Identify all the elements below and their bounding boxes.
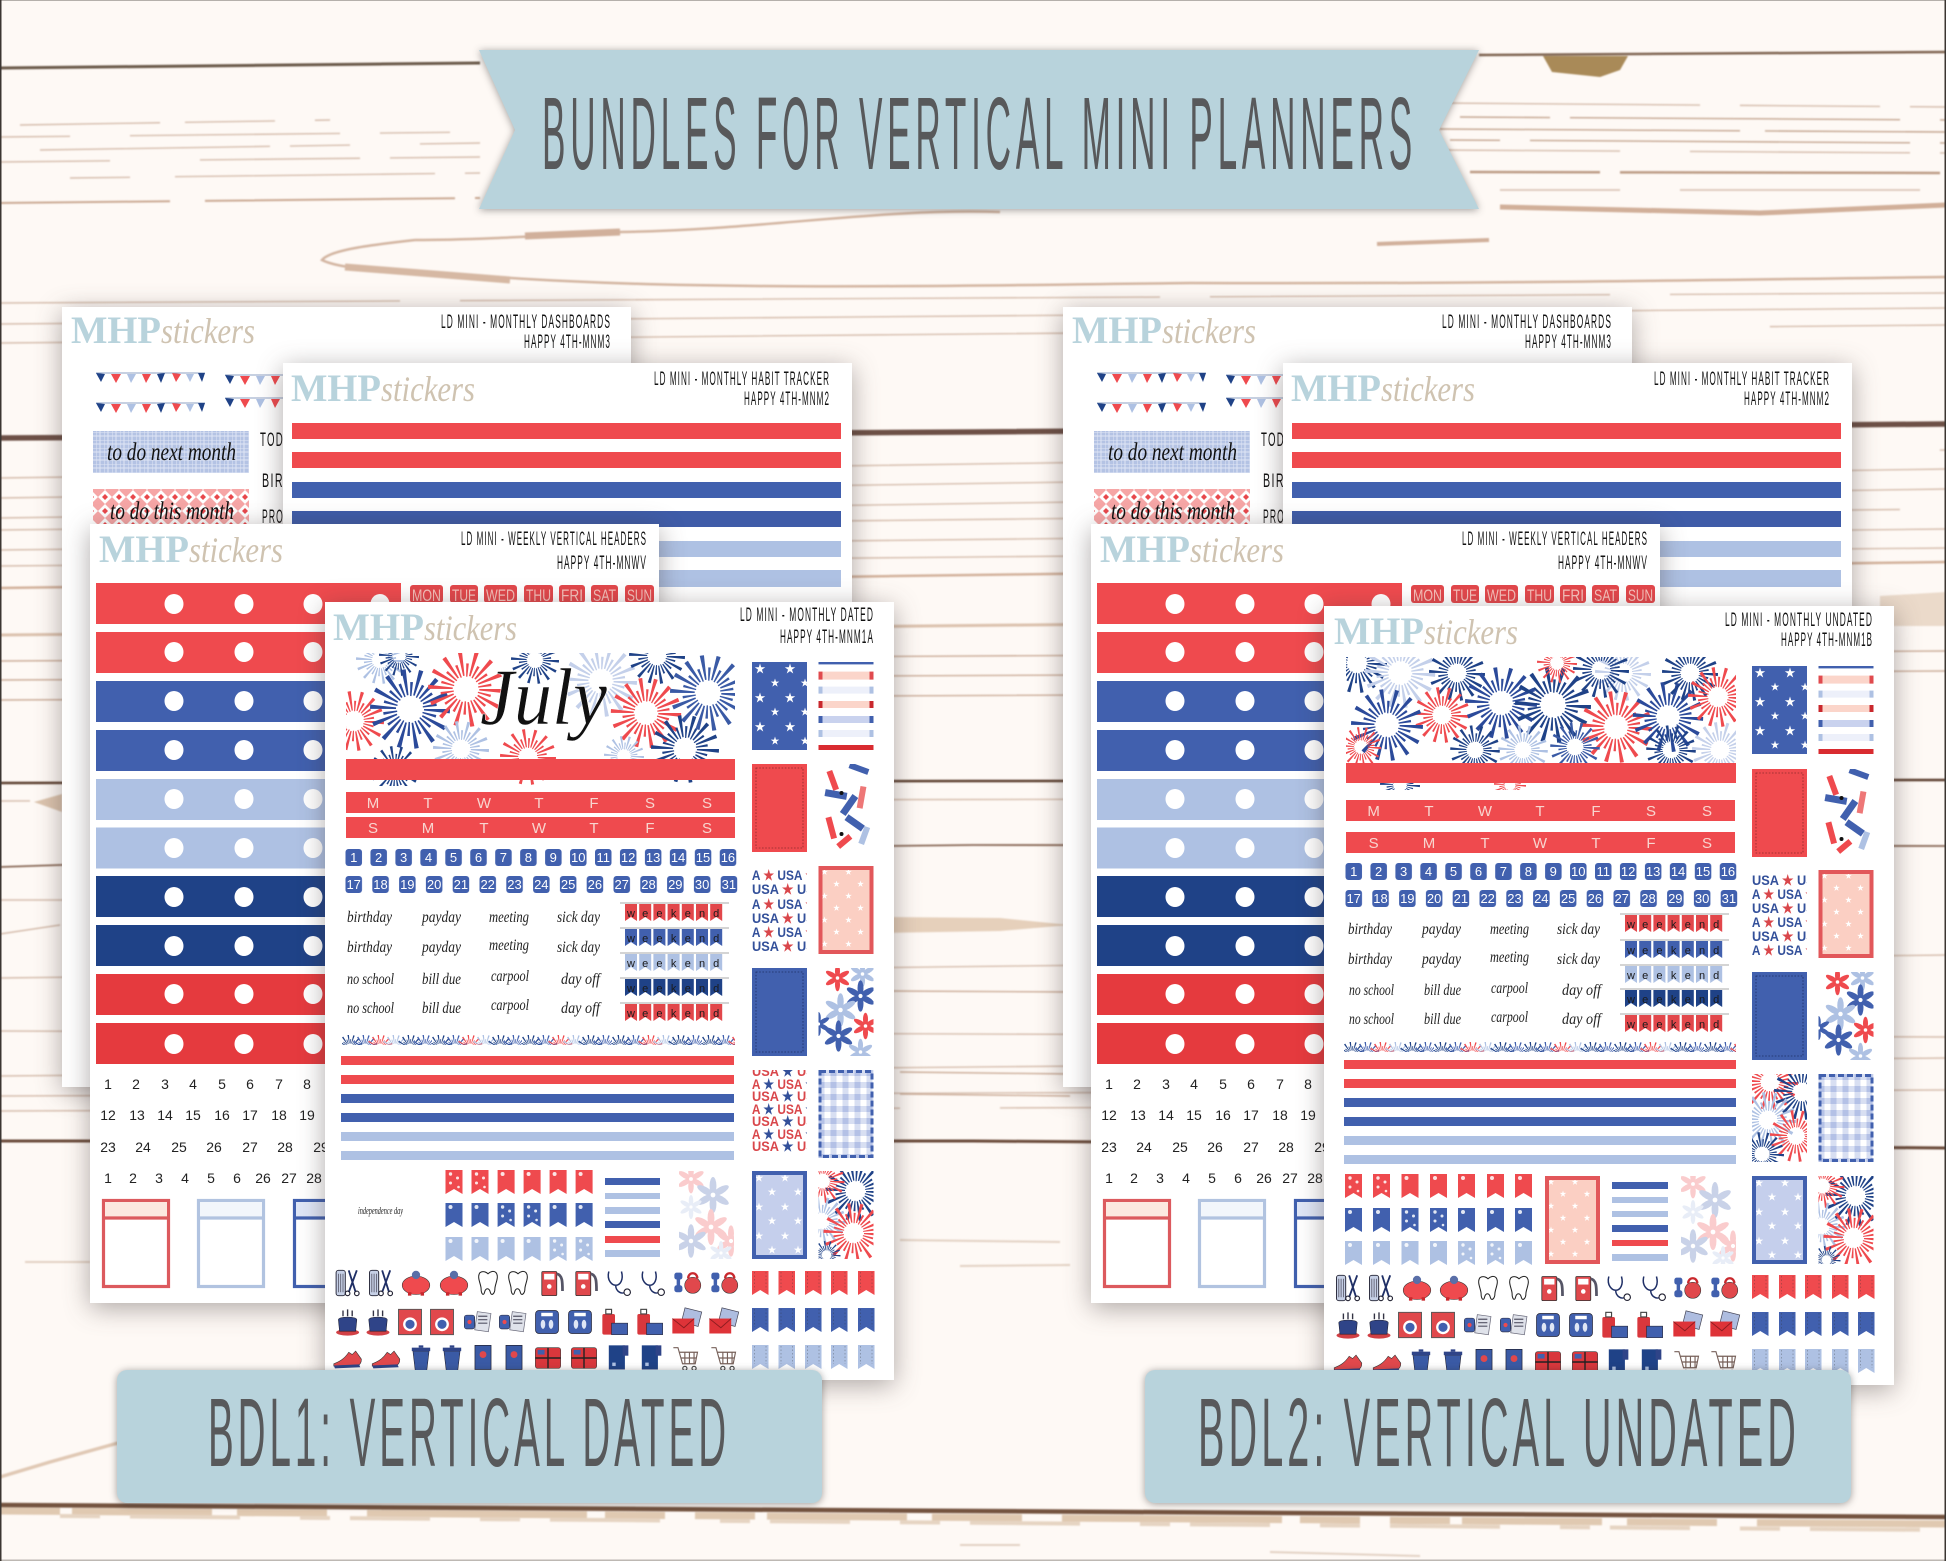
weekday rows: MTWTFSS [367, 795, 712, 812]
USA pattern card red: SA ★ USA ★ [744, 1126, 816, 1142]
date number stickers: 123456789 [1350, 864, 1557, 879]
partial labels [1261, 430, 1285, 528]
script event words: no school [347, 1000, 394, 1017]
date numbers: 17 [242, 1107, 258, 1123]
label: BDL2 vertical undated [1145, 1370, 1851, 1503]
date numbers: 12345678 [1105, 1076, 1312, 1092]
logo: MHP [1334, 610, 1424, 653]
weekday tabs: FRI [1562, 586, 1584, 605]
header bars with dots [96, 583, 401, 1064]
USA pattern card blue [752, 869, 807, 952]
to do next month sticker [93, 431, 249, 473]
date number stickers: 11 [596, 850, 610, 865]
date numbers: 25 [1172, 1139, 1188, 1155]
weekday tabs: THU [1527, 586, 1552, 605]
date numbers: 14 [1158, 1107, 1174, 1123]
logo [1100, 528, 1284, 571]
logo: stickers [424, 608, 517, 648]
script event words [347, 909, 602, 1017]
date numbers: 16 [1215, 1107, 1231, 1123]
USA pattern card red: USA ★ USA [752, 1088, 824, 1104]
weekday rows: SMTWTFS [368, 820, 712, 837]
date number stickers: 30 [695, 877, 709, 892]
habit stripes [292, 423, 841, 587]
weekday tabs: THU [526, 586, 551, 605]
date numbers: 16 [214, 1107, 230, 1123]
date numbers: 19 [1300, 1107, 1316, 1123]
weekend pennant banners: weekend [1626, 945, 1719, 957]
USA pattern card blue: SA ★ USA ★ [1744, 886, 1816, 902]
bundle 1: vertical dated sheets: LD MINI - WEEKLY VERTICAL HEADERS [461, 529, 647, 550]
sheet heading [441, 312, 611, 353]
weekday rows: SMTWTFS [1369, 835, 1712, 852]
date number stickers: 22 [1480, 891, 1495, 906]
USA pattern card red: USA ★ USA [752, 1138, 824, 1154]
bundle 1: vertical dated sheets: HAPPY 4TH-MNWV [557, 553, 647, 574]
bunting stickers [1097, 373, 1335, 413]
USA pattern card red: USA ★ USA [752, 1113, 824, 1129]
date numbers: 123456 [104, 1170, 241, 1186]
date number stickers: 123456789 [350, 850, 557, 865]
date numbers: 26 [255, 1170, 271, 1186]
date numbers: 19 [299, 1107, 315, 1123]
weekend pennant banners: weekend [1626, 919, 1719, 931]
date number stickers: 31 [722, 877, 736, 892]
sheet heading [1725, 610, 1873, 651]
header bars with dots [1097, 583, 1402, 1064]
text: BDL1: VERTICAL DATED [208, 1378, 730, 1487]
script event words: bill due [422, 971, 461, 988]
sheet: monthly dashboards [1063, 307, 1632, 1087]
date number stickers: 19 [400, 877, 415, 892]
USA pattern card blue: USA ★ USA [1752, 872, 1824, 888]
date numbers: 28 [1278, 1139, 1294, 1155]
date number stickers: 14 [671, 850, 685, 865]
logo: stickers [1162, 311, 1256, 351]
date numbers: 18 [1272, 1107, 1288, 1123]
script event words: sick day [1557, 951, 1601, 968]
USA pattern card blue: USA ★ USA [752, 938, 824, 954]
script event words: no school [347, 971, 394, 988]
date number stickers: 18 [1373, 891, 1388, 906]
logo: MHP [291, 367, 381, 410]
logo [1072, 309, 1256, 352]
date number stickers: 26 [1588, 891, 1602, 906]
weekend pennant banners [620, 903, 729, 1021]
logo: MHP [1072, 309, 1162, 352]
sheet: monthly dated [325, 602, 894, 1380]
weekend pennant banners: weekend [626, 983, 719, 995]
logo: stickers [161, 311, 255, 351]
date number stickers: 23 [507, 877, 522, 892]
date number stickers: 16 [721, 850, 735, 865]
script event words: carpool [1491, 1009, 1528, 1026]
right flags [752, 1271, 874, 1369]
USA pattern card blue: SA ★ USA ★ [1744, 914, 1816, 930]
label: BDL1 vertical dated [117, 1370, 822, 1503]
date number stickers: 27 [614, 877, 629, 892]
date number stickers: 28 [1641, 891, 1656, 906]
script event words: birthday [1348, 921, 1393, 938]
date numbers: 26 [206, 1139, 222, 1155]
date numbers: 12 [100, 1107, 116, 1123]
logo: stickers [189, 530, 283, 570]
date numbers: 23 [1101, 1139, 1117, 1155]
date numbers: 26 [1256, 1170, 1272, 1186]
date numbers: 28 [277, 1139, 293, 1155]
weekend pennant banners: weekend [1626, 970, 1719, 982]
title ribbon banner [479, 50, 1479, 209]
to do this month sticker: to do this month [1111, 498, 1235, 525]
partial labels: TOD [1261, 430, 1285, 451]
date number stickers: 14 [1671, 864, 1685, 879]
script event words: carpool [1491, 980, 1528, 997]
script event words: meeting [1490, 949, 1529, 966]
date number stickers [345, 849, 739, 893]
script event words: payday [1421, 921, 1462, 938]
sheet: monthly dashboards: HAPPY 4TH-MNM3 [524, 332, 611, 353]
USA pattern card red: SA ★ USA ★ [744, 1076, 816, 1092]
logo: stickers [1190, 530, 1284, 570]
date numbers: 23 [100, 1139, 116, 1155]
small stripes [1612, 1182, 1668, 1261]
weekday tabs: SAT [593, 586, 616, 605]
sheet: weekly vertical headers [90, 524, 659, 1303]
logo: stickers [1424, 612, 1518, 652]
date number stickers: 13 [646, 850, 660, 865]
date number stickers: 15 [1696, 864, 1710, 879]
weekday tabs [410, 585, 654, 605]
partial labels [260, 430, 284, 528]
sheet: monthly habit tracker: HAPPY 4TH-MNM2 [1744, 389, 1830, 410]
date number stickers: 11 [1596, 864, 1610, 879]
weekday rows [346, 792, 735, 838]
partial labels: TOD [260, 430, 284, 451]
script event words: day off [561, 1000, 602, 1017]
weekday tabs: SUN [1628, 586, 1653, 605]
script event words: sick day [557, 909, 601, 926]
date number stickers: 17 [346, 877, 361, 892]
date number stickers: 20 [1427, 891, 1441, 906]
date numbers: 15 [1186, 1107, 1202, 1123]
pale flower card [1677, 1170, 1748, 1270]
USA pattern card blue: USA ★ USA [1752, 900, 1824, 916]
date number stickers: 24 [1534, 891, 1549, 906]
weekday rows: MTWTFSS [1367, 803, 1712, 820]
sheet: monthly dashboards: PRO [262, 507, 284, 528]
USA pattern card blue: USA ★ USA [752, 910, 824, 926]
weekday tabs: FRI [561, 586, 583, 605]
date number stickers: 10 [1571, 864, 1585, 879]
weekday tabs: SUN [627, 586, 652, 605]
weekday rows [1346, 800, 1735, 853]
date number stickers: 12 [621, 850, 635, 865]
logo: MHP [99, 528, 189, 571]
partial labels: BIR [1263, 471, 1285, 492]
date number stickers: 10 [571, 850, 585, 865]
logo: MHP [71, 309, 161, 352]
script event words: meeting [489, 909, 529, 926]
bundle 1: vertical dated sheets: LD MINI - MONTHLY HABIT TRACKER [654, 369, 830, 390]
sheet: monthly dashboards [62, 307, 631, 1087]
script event words [1348, 921, 1603, 1028]
logo [99, 528, 283, 571]
icon rows [1334, 1275, 1740, 1375]
weekend pennant banners: weekend [626, 933, 719, 945]
date number stickers: 22 [480, 877, 495, 892]
script event words: sick day [1557, 921, 1601, 938]
USA pattern card red: USA ★ USA [752, 1063, 824, 1079]
date numbers: 28 [1307, 1170, 1323, 1186]
weekday tabs: MON [412, 586, 441, 605]
date numbers: 27 [242, 1139, 258, 1155]
bundle 1: vertical dated sheets [62, 307, 894, 1380]
script event words: bill due [1424, 982, 1461, 999]
USA pattern card blue: USA ★ USA [752, 881, 824, 897]
date number stickers: 21 [454, 877, 468, 892]
date numbers: 15 [185, 1107, 201, 1123]
USA pattern card blue: SA ★ USA ★ [744, 896, 816, 912]
to do this month sticker: to do this month [110, 498, 234, 525]
date number stickers: 21 [1454, 891, 1468, 906]
sheet heading [461, 529, 647, 574]
date numbers: 24 [135, 1139, 151, 1155]
date number stickers: 30 [1695, 891, 1709, 906]
date number stickers: 20 [427, 877, 441, 892]
fireworks July banner [346, 653, 735, 786]
date number stickers: 31 [1722, 891, 1736, 906]
weekday tabs: TUE [452, 586, 476, 605]
sheet: weekly vertical headers [1091, 524, 1660, 1303]
washi stripes [1344, 1060, 1736, 1164]
script event words: bill due [422, 1000, 461, 1017]
sheet heading [1654, 369, 1830, 410]
date number stickers: 29 [668, 877, 683, 892]
framed boxes [1104, 1200, 1360, 1286]
USA pattern card blue: SA ★ USA ★ [1744, 942, 1816, 958]
framed boxes [104, 1200, 360, 1286]
script event words: payday [421, 909, 462, 926]
date number stickers: 12 [1621, 864, 1635, 879]
fireworks banner [1346, 657, 1736, 790]
peach star card [1545, 1176, 1600, 1264]
script event words: birthday [347, 939, 393, 956]
month name: July [480, 654, 607, 742]
date numbers [1101, 1076, 1330, 1186]
date numbers: 13 [1130, 1107, 1146, 1123]
script event words: birthday [1348, 951, 1393, 968]
sheet heading [1462, 529, 1648, 574]
logo: MHP [1100, 528, 1190, 571]
script event words: day off [1562, 1011, 1603, 1028]
script event words: day off [1562, 982, 1603, 999]
script event words: no school [1349, 1011, 1394, 1028]
date numbers: 17 [1243, 1107, 1259, 1123]
script event words: bill due [1424, 1011, 1461, 1028]
date number stickers: 15 [696, 850, 710, 865]
date numbers: 25 [171, 1139, 187, 1155]
script event words: no school [1349, 982, 1394, 999]
fireworks washi strip [1344, 1042, 1736, 1052]
habit stripes [1292, 423, 1841, 587]
date numbers [100, 1076, 329, 1186]
right column pattern cards [1752, 666, 1874, 1264]
bunting stickers [96, 373, 334, 413]
date numbers: 12345678 [104, 1076, 311, 1092]
weekend pennant banners: weekend [1626, 994, 1719, 1006]
sheet: monthly dashboards: HAPPY 4TH-MNM3 [1525, 332, 1612, 353]
date number stickers: 25 [1561, 891, 1575, 906]
bundle 2: vertical undated sheets: LD MINI - WEEKLY VERTICAL HEADERS [1462, 529, 1648, 550]
to do next month sticker: to do next month [107, 439, 236, 466]
sheet: monthly undated [1324, 606, 1894, 1385]
to do next month sticker: to do next month [1108, 439, 1237, 466]
washi stripes [341, 1056, 734, 1160]
right column pattern cards [752, 662, 874, 1259]
script event words: meeting [489, 937, 529, 954]
independence day label: independence day [358, 1205, 403, 1217]
sheet heading [740, 605, 874, 648]
logo: stickers [381, 369, 475, 409]
USA pattern card red: SA ★ USA ★ [744, 1101, 816, 1117]
sheet: monthly dashboards: PRO [1263, 507, 1285, 528]
sheet: monthly habit tracker [283, 363, 852, 693]
weekday tabs: WED [1487, 586, 1516, 605]
weekend pennant banners: weekend [626, 1008, 719, 1020]
date numbers: 29 [1314, 1139, 1330, 1155]
logo: MHP [1291, 367, 1381, 410]
date number stickers: 18 [373, 877, 388, 892]
date number stickers: 23 [1507, 891, 1522, 906]
USA pattern card blue [1752, 874, 1807, 956]
script event words: carpool [491, 997, 529, 1014]
sheet heading [654, 369, 830, 410]
date number stickers: 13 [1646, 864, 1660, 879]
bundle 2: vertical undated sheets: HAPPY 4TH-MNWV [1558, 553, 1648, 574]
weekday tabs [1411, 585, 1655, 605]
logo [333, 606, 517, 649]
script event words: payday [1421, 951, 1462, 968]
logo: MHP [333, 606, 424, 649]
partial labels: BIR [262, 471, 284, 492]
icon rows [334, 1270, 739, 1371]
logo [291, 367, 475, 410]
script event words: carpool [491, 968, 529, 985]
date numbers: 18 [271, 1107, 287, 1123]
USA pattern card blue: USA ★ USA [1752, 928, 1824, 944]
bundle 2: vertical undated sheets [1063, 307, 1894, 1385]
date numbers: 24 [1136, 1139, 1152, 1155]
date number stickers [1345, 863, 1739, 907]
sheet: monthly habit tracker: HAPPY 4TH-MNM2 [744, 389, 830, 410]
date numbers: 27 [1282, 1170, 1298, 1186]
pale flower card [675, 1165, 746, 1265]
to do next month sticker [1094, 431, 1250, 473]
logo: stickers [1381, 369, 1475, 409]
sheet heading [1442, 312, 1612, 353]
date number stickers: 25 [561, 877, 575, 892]
weekend pennant banners: weekend [626, 958, 719, 970]
to do this month sticker [93, 489, 249, 527]
weekday tabs: WED [486, 586, 515, 605]
weekend pennant banners: weekend [626, 908, 719, 920]
weekday tabs: TUE [1453, 586, 1477, 605]
right flags [1752, 1275, 1874, 1373]
date number stickers: 29 [1668, 891, 1683, 906]
bundle 1: vertical dated sheets: LD MINI - MONTHLY DASHBOARDS [441, 312, 611, 333]
date number stickers: 28 [641, 877, 656, 892]
sheet: monthly dated: HAPPY 4TH-MNM1A [780, 627, 874, 648]
date numbers: 27 [281, 1170, 297, 1186]
date numbers: 123456 [1105, 1170, 1242, 1186]
date number stickers: 26 [588, 877, 602, 892]
script event words: day off [561, 971, 602, 988]
bundle 2: vertical undated sheets: LD MINI - MONTHLY DASHBOARDS [1442, 312, 1612, 333]
date number stickers: 17 [1346, 891, 1361, 906]
USA pattern card blue: SA ★ USA ★ [744, 867, 816, 883]
logo [1334, 610, 1518, 653]
date numbers: 13 [129, 1107, 145, 1123]
script event words: payday [421, 939, 462, 956]
USA pattern card red [752, 1070, 807, 1152]
USA pattern card blue: SA ★ USA ★ [744, 924, 816, 940]
sheet: monthly dated: LD MINI - MONTHLY DATED [740, 605, 874, 626]
date number stickers: 16 [1721, 864, 1735, 879]
date numbers: 12 [1101, 1107, 1117, 1123]
small stripes [605, 1178, 660, 1257]
weekend pennant banners: weekend [1626, 1019, 1719, 1031]
weekday tabs: MON [1413, 586, 1442, 605]
small flags [446, 1170, 593, 1261]
date numbers: 26 [1207, 1139, 1223, 1155]
sheet: monthly habit tracker [1283, 363, 1852, 693]
fireworks washi strip [342, 1035, 735, 1045]
script event words: birthday [347, 909, 393, 926]
logo [1291, 367, 1475, 410]
date number stickers: 24 [534, 877, 549, 892]
date numbers: 28 [306, 1170, 322, 1186]
script event words: sick day [557, 939, 601, 956]
weekday tabs: SAT [1594, 586, 1617, 605]
small flags [1345, 1174, 1532, 1265]
date number stickers: 27 [1614, 891, 1629, 906]
date numbers: 29 [313, 1139, 329, 1155]
date numbers: 27 [1243, 1139, 1259, 1155]
date number stickers: 19 [1400, 891, 1415, 906]
date numbers: 14 [157, 1107, 173, 1123]
logo [71, 309, 255, 352]
to do this month sticker [1094, 489, 1250, 527]
script event words: meeting [1490, 921, 1529, 938]
weekend pennant banners [1620, 914, 1729, 1032]
